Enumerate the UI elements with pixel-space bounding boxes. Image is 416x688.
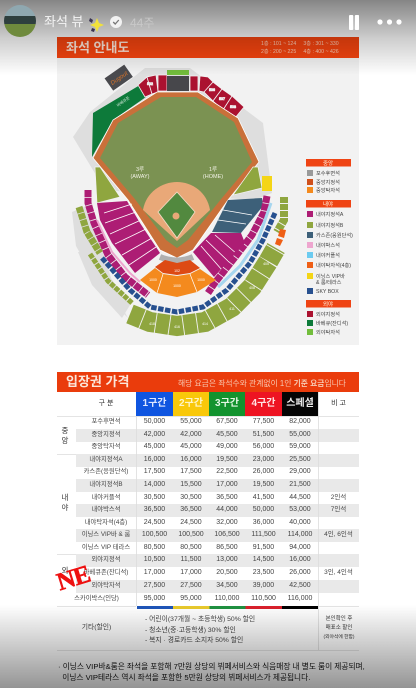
icon: pause <box>349 15 359 30</box>
heading: seat guide title: 좌석 안내도 <box>66 40 129 55</box>
row: infield reserved A: 19,500 <box>216 456 238 463</box>
row: catcher rear seat: 55,000 <box>180 418 202 425</box>
column header: zone 4: 4구간 <box>252 398 275 409</box>
row: infield box: 50,000 <box>253 506 274 513</box>
text: footnote: · 이닝스 VIP바&룸은 좌석을 포함해 7만원 상당의 뷔페서비스와 식음매장 내 별도 룸이 제공되며, <box>58 662 365 671</box>
text: discount list <box>145 615 255 644</box>
yellow Innings VIP seats <box>262 176 272 191</box>
row: innings VIP terrace <box>82 544 311 551</box>
row: central table: 45,000 <box>180 443 202 450</box>
label: third base away: 3루 <box>136 167 144 173</box>
stadium seating chart <box>72 64 353 336</box>
row: innings VIP terrace: 이닝스 VIP 테라스 <box>82 544 130 551</box>
row: infield couple: 30,500 <box>144 494 165 501</box>
legend group: infield: 내야커플석 <box>316 251 340 259</box>
legend group: outfield <box>306 300 351 336</box>
row: innings VIP bar and room: 4인, 6인석 <box>324 531 353 538</box>
row: infield box: 44,000 <box>216 506 238 513</box>
magenta small seats right <box>208 196 267 293</box>
row: outfield reserved: 16,000 <box>289 556 311 563</box>
row: infield reserved A: 25,500 <box>289 456 311 463</box>
central seats: 1000 <box>197 278 205 282</box>
row: infield reserved B: 14,000 <box>144 481 165 488</box>
story shading bottom <box>0 605 416 688</box>
red outfield seats: 506 <box>209 88 215 92</box>
row: outfield table: 34,500 <box>216 582 238 589</box>
row: sky box: 116,000 <box>288 595 312 602</box>
legend group: infield: 내야박스석 <box>316 241 340 249</box>
text: zone number ranges <box>261 40 339 55</box>
light blue band right <box>218 203 271 287</box>
row: barbecue lawn: 3인, 4인석 <box>324 569 353 576</box>
row: central reserved: 42,000 <box>180 431 202 438</box>
row: outfield reserved: 11,500 <box>181 556 201 563</box>
row: infield reserved A: 내야지정석A <box>89 456 123 463</box>
row: outfield table: 27,500 <box>180 582 202 589</box>
color strip <box>137 606 318 609</box>
row: barbecue lawn: 23,500 <box>253 569 274 576</box>
column header: category: 구 분 <box>99 400 113 407</box>
row: sky box: 95,000 <box>144 595 165 602</box>
story header bar <box>4 5 402 37</box>
row: central table: 56,000 <box>253 443 274 450</box>
infield olive seats <box>95 167 262 203</box>
field <box>93 92 259 258</box>
column header: zone 2 <box>173 392 209 416</box>
row: infield box: 내야박스석 <box>92 506 120 513</box>
column header: special <box>282 392 318 416</box>
row: innings VIP terrace: 91,500 <box>253 544 274 551</box>
text: footnote: 이닝스 VIP테라스 역시 좌석을 포함한 5만원 상당의 뷔페서비스가 제공됩니다. <box>62 672 310 682</box>
row: outfield reserved: 10,500 <box>144 556 165 563</box>
row: central reserved: 51,500 <box>253 431 274 438</box>
sky box band <box>102 213 275 312</box>
row: barbecue lawn: 17,000 <box>180 569 202 576</box>
text: remarks note: 매표소 할인 <box>326 625 352 631</box>
stadium concourse shape <box>72 68 272 318</box>
row: infield couple: 44,500 <box>289 494 311 501</box>
legend group: infield: 내야탁자석(4층) <box>316 261 351 269</box>
text: weeks ago: 44주 <box>130 16 154 30</box>
row: barbecue lawn: 26,000 <box>289 569 311 576</box>
icon: more menu <box>378 19 402 25</box>
row: central reserved: 중앙지정석 <box>92 431 120 438</box>
row: infield couple <box>92 494 346 501</box>
row: catcher rear seat: 포수후면석 <box>92 418 120 425</box>
row: innings VIP bar and room <box>76 529 359 542</box>
row: sky box: 95,000 <box>180 595 202 602</box>
legend group: central <box>306 159 351 194</box>
row: innings VIP bar and room: 100,500 <box>178 531 204 538</box>
label: first base home: 1루 <box>209 167 217 173</box>
row: barbecue lawn: 20,500 <box>216 569 238 576</box>
row: cass zone: 17,500 <box>180 468 202 475</box>
legend group: outfield: 외야 <box>323 300 333 308</box>
text: price note: 해당 요금은 좌석수와 관계없이 1인 기준 요금입니다 <box>178 379 346 388</box>
row: outfield table: 외야탁자석 <box>92 582 120 589</box>
row: catcher rear seat: 50,000 <box>144 418 165 425</box>
story shading top <box>0 0 416 75</box>
label: third base away: (AWAY) <box>130 174 150 180</box>
infield grass <box>158 192 195 238</box>
row: infield couple: 36,500 <box>216 494 238 501</box>
heading: ticket price title: 입장권 가격 <box>66 374 129 389</box>
row: central reserved: 45,500 <box>216 431 238 438</box>
column header: zone 4 <box>245 392 282 416</box>
row: infield table: 24,500 <box>144 519 165 526</box>
row: barbecue lawn <box>84 568 353 576</box>
legend group: infield <box>306 200 353 295</box>
central seats: 1000 <box>149 278 157 282</box>
legend group: infield: 내야지정석B <box>316 221 344 229</box>
outer 400 level seats: 418 <box>149 322 155 326</box>
legend group: infield: & 룸/테라스 <box>316 278 342 286</box>
column header: zone 2: 2구간 <box>179 398 203 409</box>
text: discount list: - 어린이(37개월 ~ 초등학생) 50% 할인 <box>145 616 255 623</box>
heading band: seat guide <box>57 37 359 58</box>
text: remarks note: (외야석에 한함) <box>323 635 354 640</box>
row: outfield reserved: 외야지정석 <box>92 556 120 563</box>
row: barbecue lawn: 바베큐존(잔디석) <box>84 569 128 576</box>
row: sky box <box>74 594 312 602</box>
row: outfield reserved: 14,500 <box>253 556 274 563</box>
label: infield group <box>62 493 68 512</box>
row: innings VIP bar and room: 114,000 <box>288 531 312 538</box>
label: other discounts: 기타(할인) <box>82 624 111 631</box>
row: infield couple: 2인석 <box>331 494 346 501</box>
legend group: central: 중앙 <box>323 159 333 167</box>
olive lower band left <box>90 254 132 303</box>
outer 400 level seats: 408 <box>249 286 255 290</box>
row: cass zone: 22,500 <box>216 468 238 475</box>
orange table seats right <box>275 229 286 246</box>
central seats <box>140 257 216 297</box>
label: first base home: (HOME) <box>203 174 223 180</box>
row: infield couple: 내야커플석 <box>92 494 120 501</box>
label: outfield group: 외 <box>62 566 68 575</box>
label: infield group: 야 <box>62 502 68 512</box>
row: barbecue lawn: 17,000 <box>144 569 165 576</box>
infield magenta seats left <box>97 201 160 273</box>
legend group: infield: 이닝스 VIP바 <box>316 272 345 280</box>
row: infield reserved A <box>76 454 359 467</box>
outer 400 level seats: 405 <box>263 262 269 266</box>
row: innings VIP terrace: 80,500 <box>144 544 165 551</box>
red outfield seats: 502 <box>147 82 153 86</box>
legend <box>306 159 353 336</box>
heading band: ticket prices <box>57 372 359 392</box>
legend group: outfield: 외야지정석 <box>316 310 340 318</box>
row: central reserved: 55,000 <box>289 431 311 438</box>
column header: special: 스페셜 <box>286 398 314 409</box>
row: outfield table: 39,000 <box>253 582 274 589</box>
row: catcher rear seat: 67,500 <box>216 418 238 425</box>
row: infield couple: 41,500 <box>253 494 274 501</box>
row: cass zone <box>84 468 311 475</box>
olive upper seats right <box>277 197 284 232</box>
outer 400 level seats: 414 <box>202 322 208 326</box>
panel: ticket price table <box>57 372 359 392</box>
legend group: central: 중앙지정석 <box>316 178 340 186</box>
infield dirt <box>143 182 210 241</box>
olive upper band left <box>79 207 100 253</box>
row: innings VIP terrace: 86,500 <box>216 544 238 551</box>
row: infield table: 내야탁자석(4층) <box>85 519 127 526</box>
outer 400 level seats <box>130 248 276 329</box>
panel: seat map <box>57 37 359 345</box>
row: outfield table: 27,500 <box>144 582 165 589</box>
row: infield box: 7인석 <box>331 506 346 513</box>
legend group: central: 중앙탁자석 <box>316 186 340 194</box>
infield magenta seats right <box>193 233 245 277</box>
row: innings VIP terrace: 80,500 <box>180 544 202 551</box>
row: infield reserved B: 내야지정석B <box>89 481 123 488</box>
pitcher's mound <box>172 212 180 220</box>
row: catcher rear seat: 82,000 <box>289 418 311 425</box>
icon: sparkle <box>89 18 104 32</box>
row: cass zone: 29,000 <box>289 468 311 475</box>
row: central table: 59,000 <box>289 443 311 450</box>
batter's eye and top green seats <box>167 70 189 91</box>
stamp: NE: NE <box>54 561 93 596</box>
row: central reserved <box>76 429 359 442</box>
label: central group: 중 <box>62 426 68 435</box>
row: infield box <box>76 504 359 517</box>
outfield wall seats: green bullpen <box>92 85 146 157</box>
row: cass zone: 17,500 <box>144 468 165 475</box>
legend group: infield: 내야지정석A <box>316 210 344 218</box>
outfield wall seats: green bullpen: 바베큐존 <box>115 94 131 108</box>
row: sky box: 110,000 <box>215 595 239 602</box>
column header: remarks: 비 고 <box>331 400 346 407</box>
label: infield group: 내 <box>62 493 68 502</box>
row: cass zone: 26,000 <box>253 468 274 475</box>
row: central reserved: 42,000 <box>144 431 165 438</box>
row: innings VIP bar and room: 111,500 <box>251 531 276 538</box>
icon: verified badge <box>110 16 122 28</box>
row: central table: 45,000 <box>144 443 165 450</box>
text: footnote <box>58 662 365 682</box>
row: infield table: 32,000 <box>216 519 238 526</box>
row: infield table <box>85 518 311 526</box>
row: central table: 중앙탁자석 <box>92 443 120 450</box>
text: zone number ranges: 1층 : 101 ~ 124 3층 : 301 ~ 330 <box>261 41 339 47</box>
red outfield seats: 507 <box>219 97 225 101</box>
legend group: infield: 카스존(응원단석) <box>316 231 353 239</box>
text: discount list: - 복지 · 경로카드 소지자 50% 할인 <box>145 637 243 644</box>
label: central group <box>62 426 68 444</box>
red outfield seats <box>138 75 244 118</box>
central seats: 1000 <box>173 284 181 288</box>
outer 400 level seats: 411 <box>229 307 235 311</box>
legend group: central: 포수후면석 <box>316 169 340 177</box>
row: infield reserved B: 15,500 <box>180 481 202 488</box>
row: infield table: 24,500 <box>180 519 202 526</box>
row: innings VIP bar and room: 100,500 <box>142 531 167 538</box>
legend group: outfield: 바베큐(잔디석) <box>316 319 348 327</box>
row: outfield reserved <box>76 554 359 567</box>
row: central table: 49,000 <box>216 443 238 450</box>
label: central group: 앙 <box>62 436 68 444</box>
row: cass zone: 카스존(응원단석) <box>84 468 128 475</box>
column header: zone 3: 3구간 <box>215 398 239 409</box>
avatar: stadium <box>4 5 36 37</box>
slate seats right <box>212 198 263 233</box>
row: sky box: 110,500 <box>251 595 276 602</box>
row: innings VIP terrace: 94,000 <box>289 544 311 551</box>
text: zone number ranges: 2층 : 200 ~ 225 4층 : 400 ~ 426 <box>261 49 339 55</box>
legend group: outfield: 외야탁자석 <box>316 328 340 336</box>
row: catcher rear seat: 77,500 <box>253 418 274 425</box>
column header: zone 1 <box>136 392 173 416</box>
row: infield box: 36,500 <box>144 506 165 513</box>
row: catcher rear seat <box>92 418 311 425</box>
row: infield reserved A: 16,000 <box>144 456 165 463</box>
row: infield table: 40,000 <box>289 519 311 526</box>
row: outfield reserved: 13,000 <box>216 556 238 563</box>
row: infield reserved B: 21,500 <box>289 481 311 488</box>
legend group: infield: SKY BOX <box>316 289 339 295</box>
text: discount list: - 청소년(중·고등학생) 30% 할인 <box>145 626 236 634</box>
row: central table <box>92 442 311 450</box>
magenta small seats left <box>88 190 148 295</box>
row: outfield table <box>76 580 359 593</box>
red outfield seats: 508 <box>230 105 236 109</box>
row: infield reserved B: 19,500 <box>253 481 274 488</box>
row: infield reserved A: 16,000 <box>180 456 202 463</box>
row: infield reserved B: 17,000 <box>216 481 238 488</box>
outer 400 level seats: 416 <box>174 325 180 329</box>
pink band left <box>97 220 140 282</box>
row: innings VIP bar and room: 106,500 <box>214 531 240 538</box>
sign: dugout <box>105 65 133 91</box>
row: infield reserved B <box>76 479 359 492</box>
row: infield reserved A: 23,000 <box>253 456 274 463</box>
account name: 좌석 뷰 <box>44 14 84 29</box>
text: remarks note: 본인확인 후 <box>326 616 352 622</box>
row: sky box: 스카이박스(인당) <box>74 595 119 602</box>
central seats: 102 <box>174 269 180 273</box>
text: remarks note <box>323 615 354 640</box>
row: infield box: 53,000 <box>289 506 311 513</box>
sign: dugout: Dugout <box>110 71 129 87</box>
legend group: infield: 내야 <box>323 200 333 208</box>
row: innings VIP bar and room: 이닝스 VIP바 & 룸 <box>82 531 130 538</box>
row: infield box: 36,500 <box>180 506 202 513</box>
column header: zone 3 <box>209 392 245 416</box>
row: infield couple: 30,500 <box>180 494 202 501</box>
column header: zone 1: 1구간 <box>143 398 166 409</box>
row: outfield table: 42,500 <box>289 582 311 589</box>
row: infield table: 36,000 <box>253 519 274 526</box>
